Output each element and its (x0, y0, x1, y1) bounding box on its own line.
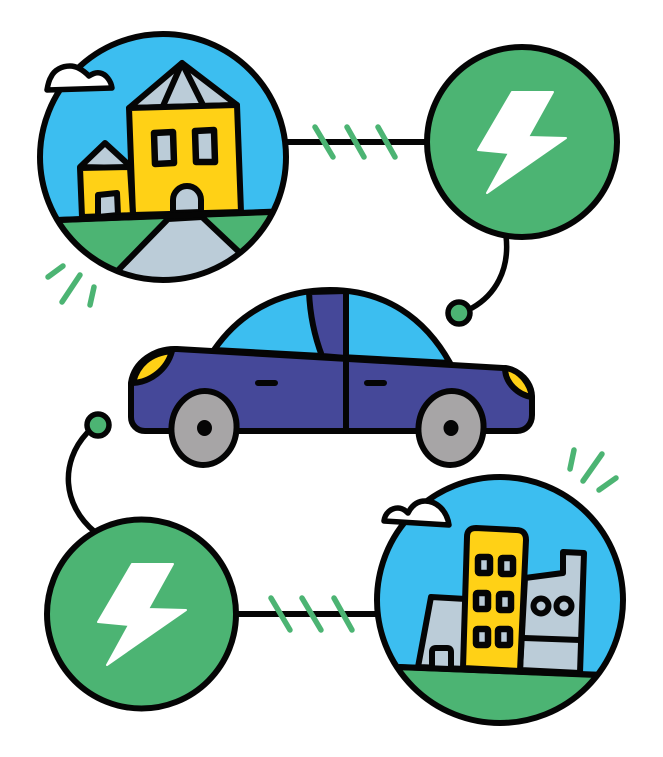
rear wheel (415, 388, 487, 468)
large house (129, 63, 241, 215)
icon: lightning bolt (98, 564, 186, 665)
car body (131, 349, 532, 431)
car roof and windows (214, 290, 450, 363)
panel: top charger (427, 47, 617, 237)
ground (59, 208, 272, 268)
ground line (400, 667, 597, 675)
panel: house scene (37, 31, 289, 283)
icon: lightning bolt (478, 92, 566, 193)
car (131, 290, 532, 468)
left headlight (133, 351, 172, 383)
circle outline (377, 477, 623, 723)
small house (80, 143, 133, 217)
connector: bottom charger to car (68, 414, 109, 532)
door line (343, 358, 349, 431)
circle outline (40, 34, 286, 280)
icon: green spark lines near city (570, 450, 616, 490)
connector: top charger to car (448, 236, 507, 324)
connector: house to top charger (286, 127, 427, 157)
road (116, 218, 240, 277)
car pillar (309, 291, 346, 358)
icon: cloud over house (47, 66, 112, 90)
icon: green spark lines near house (48, 266, 94, 305)
right building (520, 552, 584, 673)
door handles (258, 380, 384, 386)
panel: bottom charger (47, 520, 236, 708)
ground line (60, 212, 272, 220)
yellow tower (463, 528, 526, 671)
left building (418, 597, 466, 669)
connector: bottom charger to city (236, 598, 377, 630)
icon: cloud over city (384, 501, 449, 525)
panel: city scene (370, 477, 630, 730)
ground (398, 664, 596, 720)
right headlight (505, 368, 532, 397)
front wheel (168, 388, 240, 468)
